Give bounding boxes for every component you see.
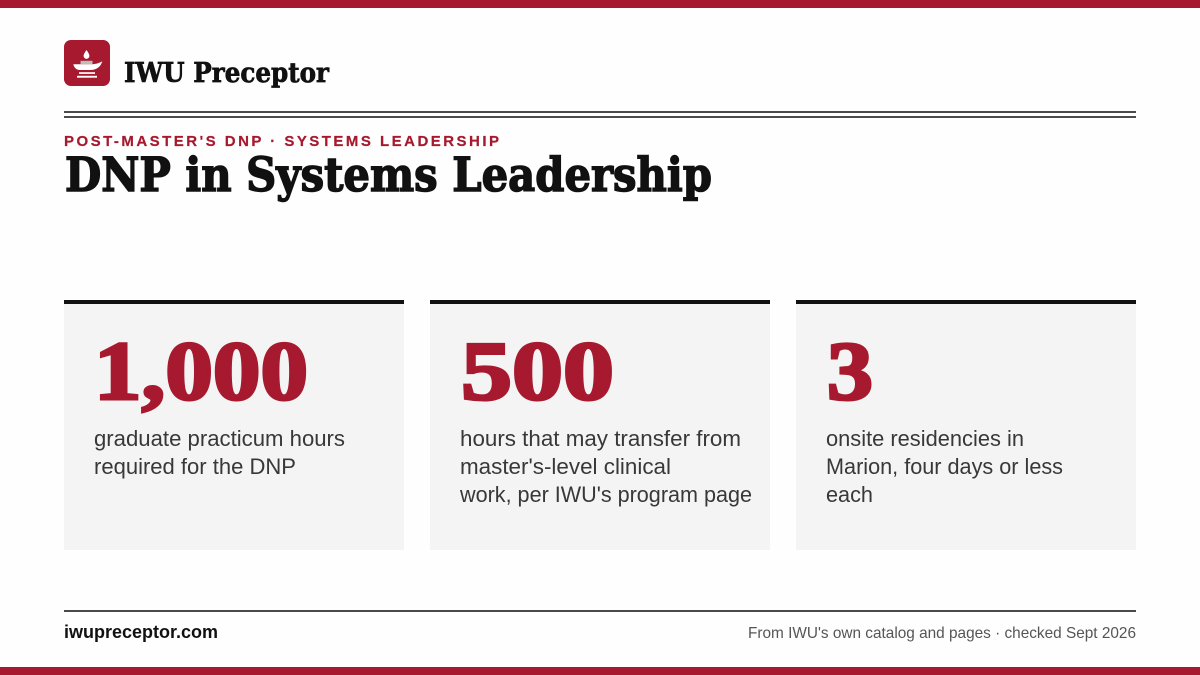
stat: 500: 500 bbox=[461, 325, 614, 418]
description: transfer hours: master's-level clinical bbox=[460, 454, 671, 479]
brand header bbox=[64, 40, 330, 89]
description: residencies: Marion, four days or less bbox=[826, 454, 1063, 479]
bottom accent bar bbox=[0, 667, 1200, 675]
footer source note: From IWU's own catalog and pages · checked Sept 2026 bbox=[748, 625, 1136, 642]
stat: 1,000: 1,000 bbox=[94, 325, 308, 418]
footer site name: iwupreceptor.com bbox=[64, 622, 218, 642]
title: DNP in Systems Leadership bbox=[65, 148, 712, 203]
description: transfer hours: hours that may transfer from bbox=[460, 426, 741, 451]
description: residencies: onsite residencies in bbox=[826, 426, 1024, 451]
description: residencies bbox=[826, 426, 1063, 507]
description: residencies: each bbox=[826, 482, 873, 507]
top accent bar bbox=[0, 0, 1200, 8]
eyebrow label: POST-MASTER'S DNP · SYSTEMS LEADERSHIP bbox=[64, 133, 499, 150]
description: practicum hours: graduate practicum hours bbox=[94, 426, 345, 451]
stat: 3: 3 bbox=[827, 325, 873, 418]
icon: oil lamp logo bbox=[64, 40, 110, 86]
brand name: IWU Preceptor bbox=[124, 58, 330, 89]
description: transfer hours: work, per IWU's program page bbox=[459, 482, 752, 507]
panel: residencies bbox=[796, 300, 1136, 550]
panel: transfer hours bbox=[430, 300, 770, 550]
description: practicum hours: required for the DNP bbox=[94, 454, 296, 479]
description: practicum hours bbox=[94, 426, 345, 479]
panel: practicum hours bbox=[64, 300, 404, 550]
description: transfer hours bbox=[459, 426, 752, 507]
